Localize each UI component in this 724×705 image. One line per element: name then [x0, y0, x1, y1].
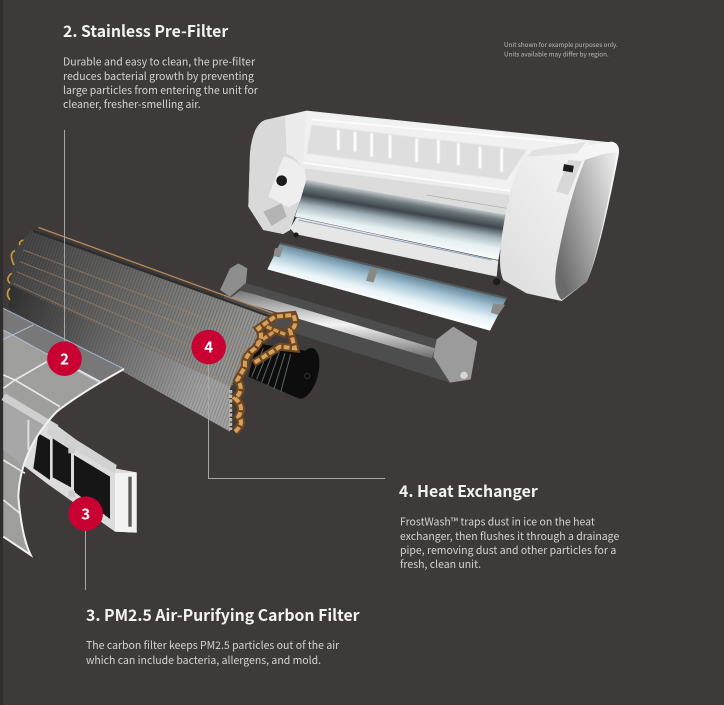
callout line: heat exchanger [208, 362, 385, 478]
marker 2: 2 [60, 348, 69, 369]
callout line: carbon filter [84, 530, 86, 590]
marker 2 [47, 341, 82, 376]
disclaimer note: Units available may differ by region. [504, 50, 609, 58]
body: heat exchanger: exchanger, then flushes it through a drainage [400, 529, 619, 544]
body: stainless pre-filter: large particles from entering the unit for [63, 83, 259, 98]
text block: carbon filter [86, 603, 360, 668]
body: carbon filter [86, 638, 340, 668]
body: heat exchanger: FrostWash™ traps dust in ice on the heat [400, 514, 595, 530]
body: stainless pre-filter: Durable and easy to clean, the pre-filter [63, 54, 256, 70]
body: stainless pre-filter [63, 54, 259, 112]
marker 3: 3 [81, 503, 90, 524]
disclaimer note [504, 40, 618, 58]
stainless pre-filter [3, 308, 124, 555]
marker 3 [68, 496, 103, 531]
text block: heat exchanger [399, 479, 619, 572]
heading: carbon filter: 3. PM2.5 Air-Purifying Carbon Filter [86, 603, 360, 626]
heading: stainless pre-filter: 2. Stainless Pre-Filter [63, 19, 228, 42]
body: stainless pre-filter: reduces bacterial growth by preventing [63, 69, 254, 84]
louver panel [267, 243, 507, 331]
body: heat exchanger [400, 514, 619, 572]
air conditioner unit body [248, 111, 619, 301]
body: carbon filter: The carbon filter keeps PM2.5 particles out of the air [86, 638, 340, 653]
copper pipes [231, 315, 295, 432]
drain tray with pipe [220, 263, 477, 383]
body: carbon filter: which can include bacteria, allergens, and mold. [86, 653, 321, 668]
body: heat exchanger: pipe, removing dust and other particles for a [400, 543, 616, 558]
marker 4: 4 [204, 337, 213, 358]
marker 4 [191, 330, 226, 364]
blower fan [248, 343, 324, 402]
disclaimer note: Unit shown for example purposes only. [504, 40, 618, 49]
heat exchanger coil [7, 227, 273, 432]
body: heat exchanger: fresh, clean unit. [400, 557, 481, 572]
body: stainless pre-filter: cleaner, fresher-smelling air. [63, 97, 201, 112]
text block: stainless pre-filter [63, 19, 259, 112]
heading: heat exchanger: 4. Heat Exchanger [399, 479, 538, 502]
callout line: pre-filter [64, 130, 66, 345]
carbon filter [3, 390, 137, 533]
